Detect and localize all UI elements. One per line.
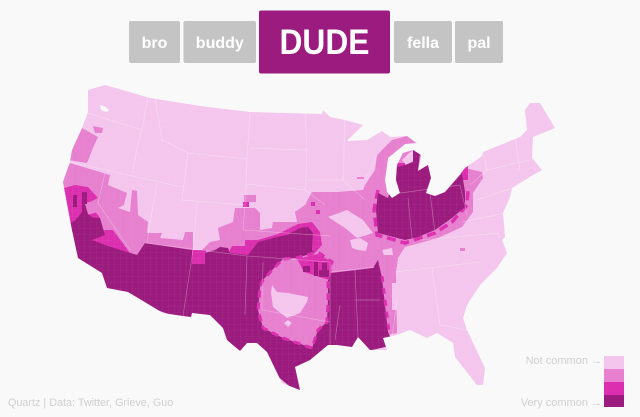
region: bright band Kansas xyxy=(228,222,322,258)
button: buddy xyxy=(184,21,256,63)
button: buddy: buddy xyxy=(196,35,244,52)
button: pal: pal xyxy=(467,35,491,52)
light pocket: small Texas spot xyxy=(284,320,292,327)
region: dark south west to deep south xyxy=(60,217,394,395)
source line: Quartz | Data: Twitter, Grieve, Guo xyxy=(8,397,173,409)
legend label: not common: Not common → xyxy=(526,355,602,367)
region: dark Midwest xyxy=(376,150,465,240)
fringe: Midwest bright edge xyxy=(374,190,468,243)
patches: bright east Kansas xyxy=(297,254,332,280)
light tip of Lower Michigan xyxy=(402,150,413,165)
button: pal xyxy=(455,21,503,63)
patches: dark east Kansas xyxy=(303,262,329,277)
button: DUDE selected xyxy=(259,10,390,74)
legend xyxy=(521,355,624,409)
map of the United States xyxy=(55,80,565,395)
region: dark northern California xyxy=(73,192,94,220)
light pocket: Tennessee xyxy=(382,248,393,255)
button: fella xyxy=(394,21,452,63)
button: bro: bro xyxy=(142,35,168,52)
legend label: very common: Very common → xyxy=(521,397,602,409)
light pocket: Missouri xyxy=(328,210,373,238)
button: DUDE selected: DUDE xyxy=(280,23,370,62)
button row xyxy=(129,10,503,74)
region: mid blob central California xyxy=(88,218,104,231)
region: bright southern California xyxy=(92,230,130,253)
region: Wyoming patch xyxy=(244,195,256,202)
region: California and Nevada xyxy=(60,163,193,258)
state boundaries xyxy=(70,97,530,345)
fringe: Michigan bright patch xyxy=(397,163,405,167)
patches: bright Iowa specks xyxy=(311,202,320,214)
region: eastern Oregon patch xyxy=(93,126,103,133)
button: fella: fella xyxy=(407,35,439,52)
button: bro xyxy=(129,21,180,63)
county texture xyxy=(65,132,480,388)
region: central and Midwest band xyxy=(200,136,483,345)
region: Carolina patch xyxy=(460,248,465,251)
light pocket: Kentucky xyxy=(350,238,368,251)
fringe: Arkansas to Alabama edge xyxy=(382,276,389,332)
region: Oregon coast xyxy=(68,128,98,163)
legend swatches xyxy=(604,356,624,407)
region: bright square Colorado xyxy=(243,202,249,207)
region: bright California xyxy=(64,185,100,222)
fringe: Lake Erie bright patch xyxy=(461,166,468,180)
region: Oklahoma hole xyxy=(258,252,332,348)
region: mid blob Sierra xyxy=(85,202,96,214)
region: Wisconsin patch xyxy=(357,177,364,179)
lake: Puget Sound xyxy=(100,105,109,112)
light pocket: Arkansas edge xyxy=(392,283,397,310)
light pocket: Oklahoma centre xyxy=(271,285,308,318)
region: bright New Mexico square xyxy=(192,250,206,264)
map base: not common counties xyxy=(55,80,565,395)
